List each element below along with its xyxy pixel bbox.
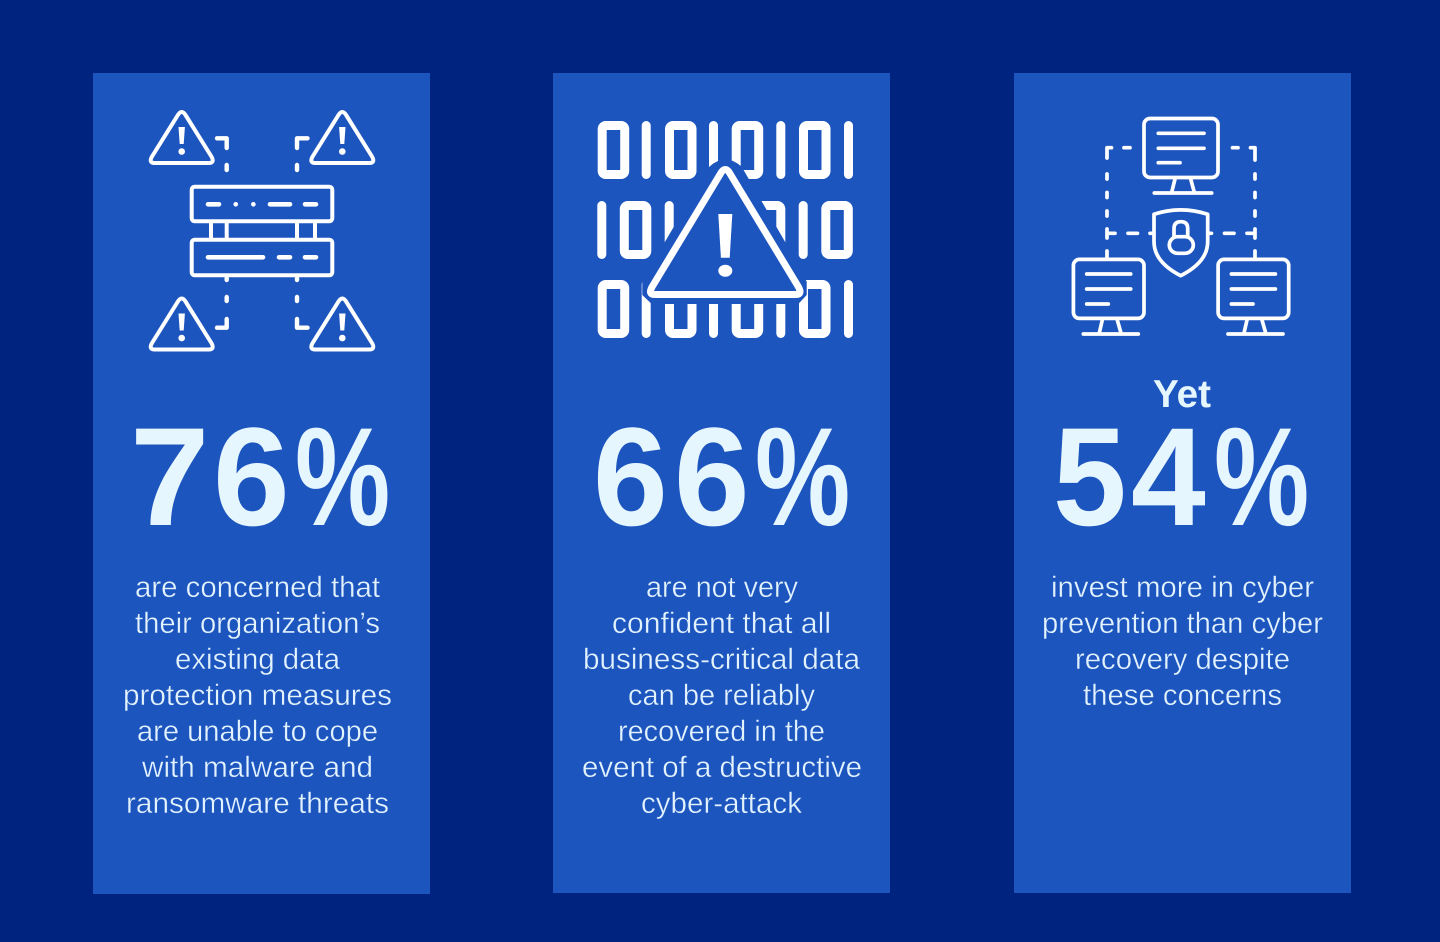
text block: prevention investment description: recovery despite [1075, 643, 1290, 676]
statistic: 54% [1053, 399, 1309, 556]
text block: recovery confidence description: business-critical data [583, 643, 860, 676]
text block: malware concern description: are concerned that [135, 571, 381, 604]
statistic: 76%: 6 [213, 399, 290, 555]
text block: prevention investment description: invest more in cyber [1051, 571, 1314, 604]
statistic: 54%: 4 [1131, 400, 1206, 556]
text block: recovery confidence description: cyber-attack [641, 787, 803, 820]
panel: malware concern [93, 73, 430, 894]
icon: networked monitors with shield [1073, 118, 1289, 334]
statistic: 54%: % [1214, 399, 1309, 555]
text block: recovery confidence description: recovered in the [618, 715, 825, 748]
text block: prevention investment description: prevention than cyber [1042, 607, 1323, 640]
text block: prevention investment description: these concerns [1083, 679, 1282, 712]
statistic: 76% [130, 398, 390, 555]
text block: malware concern description: with malware and [141, 751, 373, 784]
text block: malware concern description: ransomware threats [126, 787, 389, 820]
text block: malware concern description: are unable to cope [137, 715, 378, 748]
icon: server with warning triangles [151, 112, 373, 350]
text block: malware concern description [123, 571, 392, 820]
label: Yet: Yet [1153, 373, 1211, 416]
statistic: 66%: 6 [593, 400, 668, 556]
text block: recovery confidence description: are not very [646, 571, 798, 604]
panel: prevention investment [1014, 73, 1351, 893]
text block: malware concern description: protection measures [123, 679, 392, 712]
panel: recovery confidence [553, 73, 890, 893]
statistic: 66%: % [755, 399, 850, 555]
text block: prevention investment description [1042, 571, 1323, 712]
statistic: 76%: % [295, 399, 390, 555]
icon: binary digits with warning triangle [602, 126, 848, 334]
statistic: 54%: 5 [1053, 399, 1127, 555]
text block: recovery confidence description: event of a destructive [582, 751, 862, 784]
text block: malware concern description: their organization’s [135, 607, 380, 640]
statistic: 66%: 6 [674, 399, 750, 555]
text block: malware concern description: existing data [175, 643, 340, 676]
text block: recovery confidence description [582, 571, 862, 820]
statistic: 66% [593, 399, 850, 556]
text block: recovery confidence description: confident that all [612, 607, 831, 640]
statistic: 76%: 7 [130, 398, 209, 555]
text block: recovery confidence description: can be reliably [628, 679, 815, 712]
